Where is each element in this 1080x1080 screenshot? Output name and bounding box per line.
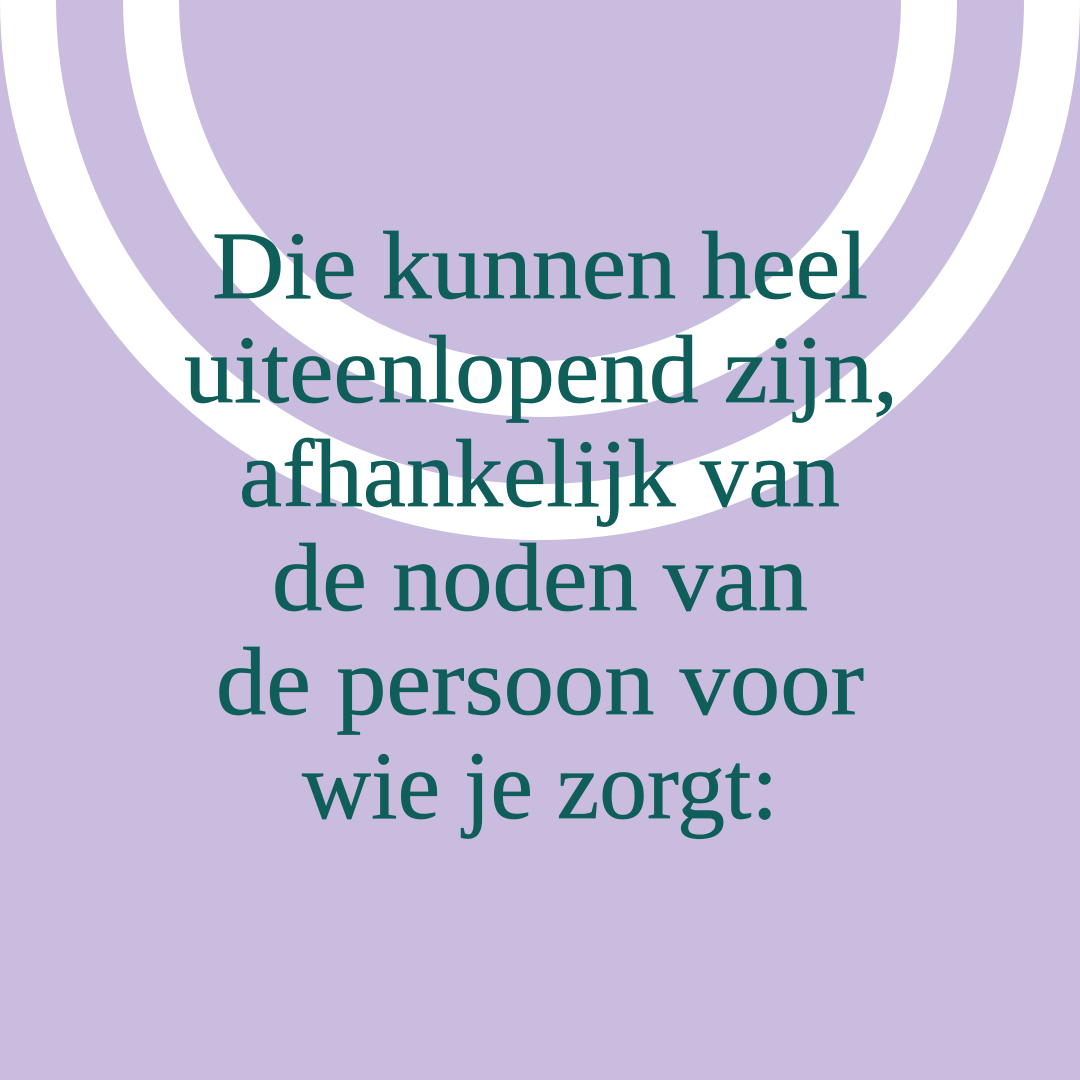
main text block: uiteenlopend zijn, xyxy=(184,316,898,423)
main text block: de noden van xyxy=(272,524,808,631)
main text block: afhankelijk van xyxy=(239,420,840,527)
main text block xyxy=(184,212,898,839)
main text block: wie je zorgt: xyxy=(302,732,778,839)
outer white half ring xyxy=(28,0,1052,512)
main text block: de persoon voor xyxy=(216,628,864,735)
main text block: Die kunnen heel xyxy=(212,212,868,319)
inner white half ring xyxy=(151,0,929,389)
